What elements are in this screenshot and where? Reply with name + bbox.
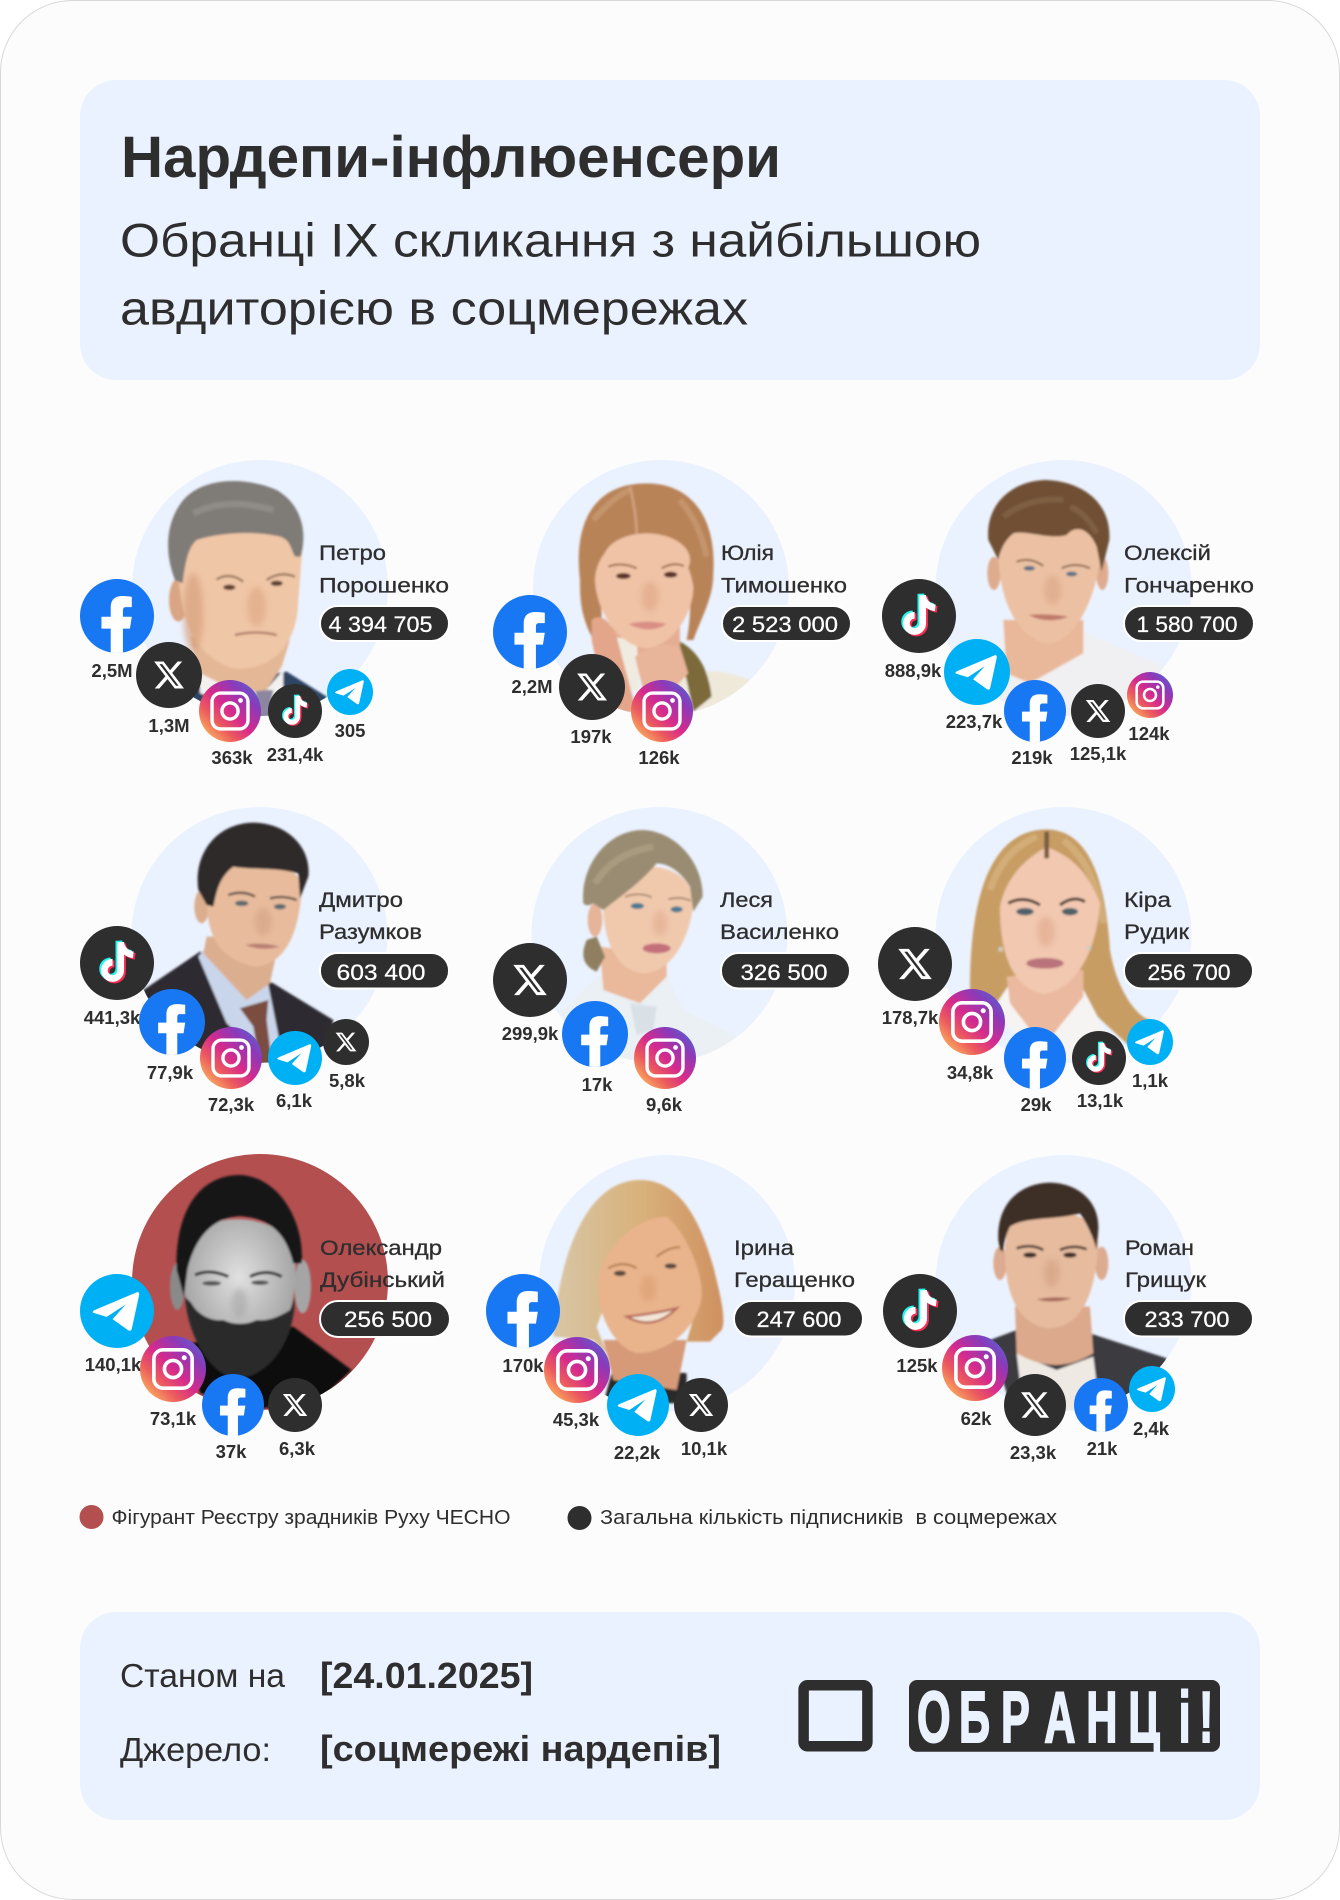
name: Олександр <box>320 1237 442 1260</box>
followers: instagram: 126k <box>638 747 680 768</box>
icon: telegram <box>944 639 1010 705</box>
followers: instagram: 363k <box>211 747 253 768</box>
background circle <box>539 1155 795 1411</box>
name: Петро <box>319 542 386 565</box>
icon: x <box>136 642 202 708</box>
followers: x: 10,1k <box>681 1438 728 1459</box>
followers: telegram: 1,1k <box>1132 1070 1169 1091</box>
name: Рудик <box>1124 921 1190 944</box>
icon: x <box>323 1019 369 1065</box>
icon: facebook <box>1074 1378 1128 1432</box>
icon: facebook <box>1004 680 1066 742</box>
total followers pill: 233 700 <box>1144 1307 1230 1332</box>
followers: tiktok: 441,3k <box>84 1007 141 1028</box>
icon: x <box>1071 684 1125 738</box>
total followers pill: 326 500 <box>740 960 828 985</box>
card: Роман Грищук <box>883 1155 1253 1463</box>
followers: telegram: 6,1k <box>276 1090 313 1111</box>
portrait: Василенко <box>560 830 737 1062</box>
total followers pill <box>1124 606 1254 641</box>
name: Разумков <box>319 921 422 944</box>
followers: tiktok: 231,4k <box>267 744 324 765</box>
legend: registry text: Фігурант Реєстру зрадників Руху ЧЕСНО <box>112 1507 510 1529</box>
subtitle <box>120 214 981 334</box>
total followers pill: 603 400 <box>336 960 426 985</box>
total followers pill <box>320 1301 450 1337</box>
total followers pill: 2 523 000 <box>732 612 838 637</box>
name: Дубінський <box>320 1269 445 1292</box>
card: Олександр Дубінський <box>80 1154 450 1462</box>
name: Василенко <box>720 921 839 944</box>
card: Ірина Геращенко <box>486 1155 863 1463</box>
card: Дмитро Разумков <box>80 807 449 1115</box>
icon: instagram <box>140 1336 206 1402</box>
name <box>720 889 839 944</box>
icon: x <box>559 654 625 720</box>
icon: facebook <box>80 579 154 653</box>
followers: facebook: 37k <box>216 1441 247 1462</box>
followers: x: 125,1k <box>1070 743 1127 764</box>
name <box>1125 1237 1207 1292</box>
icon: instagram <box>634 1027 696 1089</box>
name: Грищук <box>1125 1269 1207 1292</box>
header panel <box>80 80 1260 380</box>
logo: checkbox <box>804 1685 867 1746</box>
icon: telegram <box>80 1274 154 1348</box>
icon: x <box>493 943 567 1017</box>
legend: registry marker <box>80 1505 104 1529</box>
portrait: Геращенко <box>553 1180 723 1403</box>
followers: instagram: 9,6k <box>646 1094 683 1115</box>
background circle <box>532 807 788 1063</box>
portrait: Дубінський <box>170 1175 352 1408</box>
title: Нардепи-інфлюенсери <box>121 125 781 190</box>
followers: telegram: 140,1k <box>85 1354 142 1375</box>
background circle <box>533 460 789 716</box>
icon: tiktok <box>80 926 154 1000</box>
followers: x: 23,3k <box>1010 1442 1057 1463</box>
followers: tiktok: 125k <box>896 1355 938 1376</box>
followers: facebook: 219k <box>1011 747 1053 768</box>
followers: facebook: 2,5M <box>91 660 133 681</box>
followers: instagram: 45,3k <box>553 1409 600 1430</box>
icon: facebook <box>139 989 205 1055</box>
followers: facebook: 77,9k <box>147 1062 194 1083</box>
icon: instagram <box>544 1337 610 1403</box>
icon: x <box>268 1378 322 1432</box>
icon: telegram <box>268 1031 322 1085</box>
icon: facebook <box>493 595 567 669</box>
followers: facebook: 29k <box>1021 1094 1052 1115</box>
card: Леся Василенко <box>493 807 850 1115</box>
name: Кіра <box>1124 889 1171 912</box>
background circle <box>936 1155 1192 1411</box>
icon: x <box>1004 1374 1066 1436</box>
followers: x: 197k <box>570 726 612 747</box>
source label: Джерело: <box>120 1731 271 1768</box>
total followers pill <box>1124 953 1253 988</box>
icon: instagram <box>939 989 1005 1055</box>
followers: instagram: 62k <box>961 1408 992 1429</box>
background circle: registry flag <box>132 1154 388 1410</box>
icon: telegram <box>327 669 373 715</box>
icon: facebook <box>1004 1027 1066 1089</box>
portrait: Порошенко <box>168 481 327 723</box>
total followers pill <box>1124 1301 1253 1336</box>
icon: instagram <box>1127 672 1173 718</box>
icon: tiktok <box>1072 1031 1126 1085</box>
total followers pill <box>721 953 850 988</box>
icon: telegram <box>1127 1019 1173 1065</box>
name: Дмитро <box>319 889 403 912</box>
total followers pill <box>722 606 851 641</box>
card: Олексій Гончаренко <box>882 460 1254 768</box>
background circle <box>132 807 388 1063</box>
icon: facebook <box>202 1374 264 1436</box>
icon: tiktok <box>882 579 956 653</box>
total followers pill <box>320 953 449 988</box>
followers: telegram: 22,2k <box>614 1442 661 1463</box>
background circle <box>936 460 1192 716</box>
followers: facebook: 2,2M <box>511 676 553 697</box>
icon: telegram <box>1129 1366 1175 1412</box>
subtitle: авдиторією в соцмережах <box>120 282 748 334</box>
followers: x: 299,9k <box>502 1023 559 1044</box>
followers: x: 6,3k <box>279 1438 316 1459</box>
followers: facebook: 17k <box>582 1074 613 1095</box>
total followers pill: 1 580 700 <box>1136 612 1238 637</box>
icon: x <box>878 927 952 1001</box>
background circle <box>132 460 388 716</box>
followers: facebook: 21k <box>1087 1438 1118 1459</box>
followers: x: 178,7k <box>882 1007 939 1028</box>
source value: [соцмережі нардепів] <box>320 1728 721 1769</box>
legend: total marker <box>568 1506 592 1530</box>
followers: x: 5,8k <box>329 1070 366 1091</box>
date value: [24.01.2025] <box>320 1655 533 1696</box>
followers: tiktok: 888,9k <box>885 660 942 681</box>
name: Роман <box>1125 1237 1194 1260</box>
date label: Станом на <box>120 1657 286 1694</box>
followers: tiktok: 13,1k <box>1077 1090 1124 1111</box>
card: Петро Порошенко <box>80 460 449 768</box>
icon: x <box>674 1378 728 1432</box>
total followers pill: 256 700 <box>1148 960 1230 985</box>
icon: instagram <box>200 1027 262 1089</box>
icon: instagram <box>631 680 693 742</box>
legend <box>80 1505 1057 1530</box>
icon: tiktok <box>883 1274 957 1348</box>
followers: facebook: 170k <box>502 1355 544 1376</box>
icon: telegram <box>607 1374 669 1436</box>
followers: instagram: 73,1k <box>150 1408 197 1429</box>
portrait: Грищук <box>990 1183 1167 1410</box>
total followers pill: 4 394 705 <box>328 612 432 637</box>
name: Геращенко <box>734 1269 855 1292</box>
name <box>721 542 847 598</box>
name: Ірина <box>734 1237 794 1260</box>
name: Гончаренко <box>1124 574 1254 598</box>
total followers pill: 256 500 <box>344 1307 432 1332</box>
name <box>1124 542 1254 598</box>
name <box>734 1237 855 1292</box>
card: Юлія Тимошенко <box>493 460 851 768</box>
followers: instagram: 124k <box>1128 723 1170 744</box>
name: Тимошенко <box>721 574 847 598</box>
name <box>320 1237 445 1292</box>
name: Порошенко <box>319 574 449 598</box>
total followers pill <box>734 1301 863 1336</box>
followers: x: 1,3M <box>148 715 190 736</box>
total followers pill <box>320 606 449 641</box>
followers: telegram: 305 <box>335 720 365 741</box>
followers: instagram: 34,8k <box>947 1062 994 1083</box>
portrait: Рудик <box>970 829 1150 1060</box>
portrait: Гончаренко <box>987 480 1163 717</box>
followers: instagram: 72,3k <box>208 1094 255 1115</box>
followers: telegram: 223,7k <box>946 711 1003 732</box>
icon: facebook <box>562 1001 628 1067</box>
subtitle: Обранці ІХ скликання з найбільшою <box>120 214 981 266</box>
portrait: Разумков <box>143 823 333 1065</box>
portrait: Тимошенко <box>579 483 750 713</box>
name: Леся <box>720 889 773 912</box>
name <box>319 889 422 944</box>
name <box>319 542 449 598</box>
legend: total text: Загальна кількість підписників в соцмережах <box>600 1507 1057 1529</box>
card: Кіра Рудик <box>878 807 1253 1115</box>
followers: telegram: 2,4k <box>1133 1418 1170 1439</box>
icon: instagram <box>199 680 261 742</box>
icon: instagram <box>942 1335 1008 1401</box>
total followers pill: 247 600 <box>756 1307 842 1332</box>
logo: wordmark: ОБРАНЦі! <box>917 1677 1213 1758</box>
icon: facebook <box>486 1274 560 1348</box>
footer panel <box>80 1612 1260 1820</box>
name: Олексій <box>1124 542 1211 565</box>
background circle <box>936 807 1192 1063</box>
name <box>1124 889 1190 944</box>
name: Юлія <box>721 542 774 565</box>
icon: tiktok <box>268 684 322 738</box>
